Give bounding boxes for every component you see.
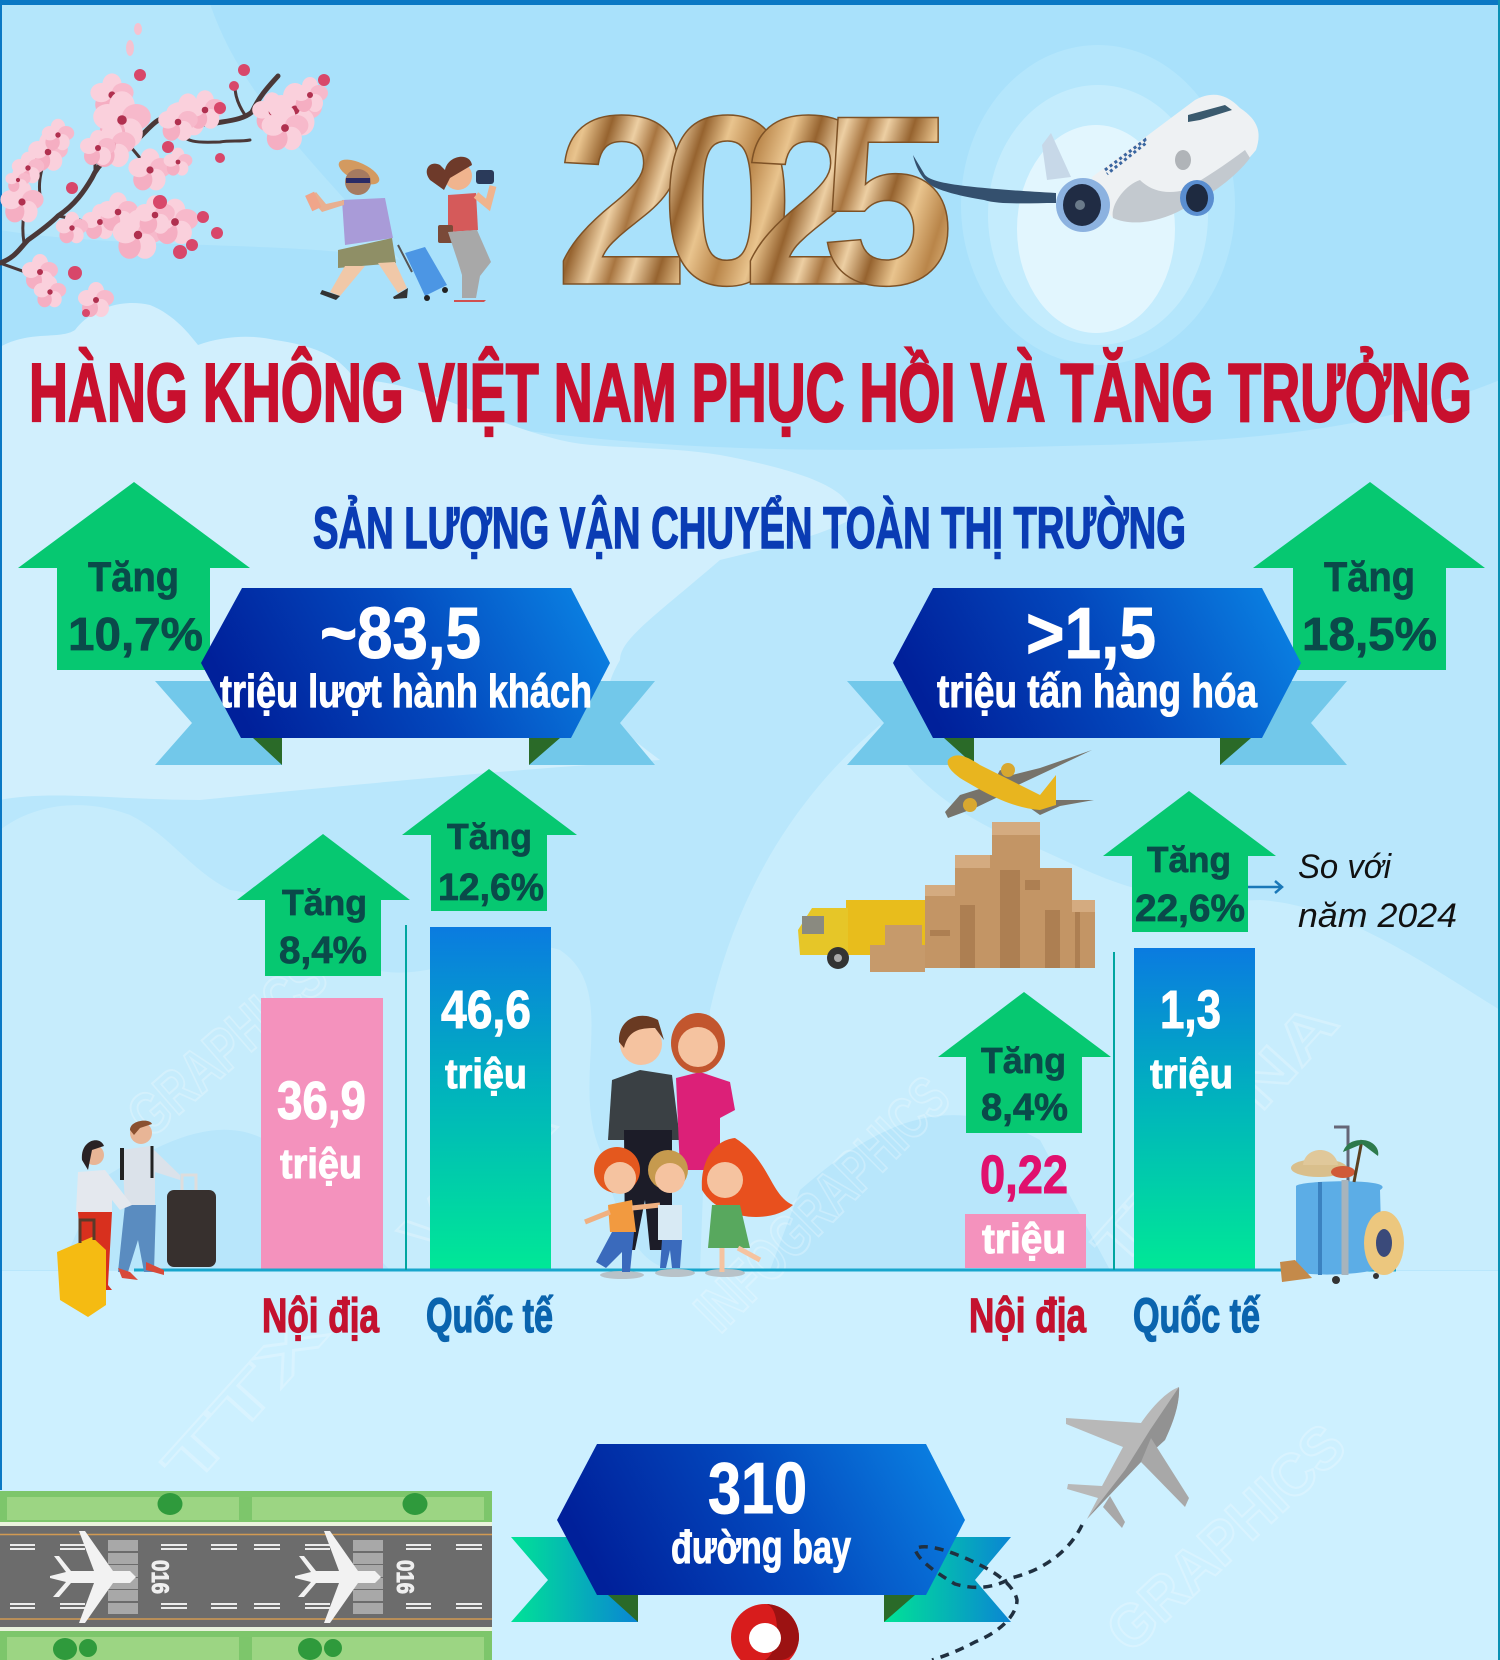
cargo plane bbox=[945, 750, 1094, 818]
ribbon: cargo: >1,5 bbox=[1026, 594, 1156, 674]
bar: domestic passengers: 36,9 bbox=[277, 1071, 366, 1131]
blue suitcase bbox=[398, 245, 448, 301]
ribbon: passengers: ~83,5 bbox=[320, 594, 481, 674]
arrow: domestic passenger growth: Tăng bbox=[282, 882, 367, 923]
gray airplane bbox=[1066, 1387, 1189, 1528]
runway illustration bbox=[0, 1491, 492, 1660]
ribbon: cargo: triệu tấn hàng hóa bbox=[937, 665, 1257, 717]
note: compared with 2024: năm 2024 bbox=[1298, 897, 1457, 935]
runway illustration: 016 bbox=[146, 1560, 173, 1594]
arrow: international passenger growth: Tăng bbox=[447, 816, 532, 857]
arrow: cargo growth: Tăng bbox=[1324, 553, 1415, 600]
dashed flight path bbox=[915, 1525, 1082, 1660]
note: compared with 2024: So với bbox=[1298, 848, 1392, 886]
ribbon: flight routes: đường bay bbox=[671, 1521, 851, 1573]
arrow: domestic cargo growth: Tăng bbox=[981, 1040, 1066, 1081]
arrow: international passenger growth bbox=[402, 769, 577, 911]
family bbox=[585, 1013, 793, 1279]
ribbon: cargo bbox=[847, 588, 1347, 765]
sun glow bbox=[961, 45, 1235, 365]
arrow: cargo growth bbox=[1253, 482, 1485, 670]
bar: domestic cargo: 0,22 bbox=[980, 1145, 1068, 1205]
note: compared with 2024 bbox=[1248, 848, 1457, 935]
labels: cargo: Quốc tế bbox=[1133, 1290, 1260, 1343]
tourist man bbox=[305, 155, 408, 300]
watermarks: GRAPHICS bbox=[1093, 1411, 1358, 1660]
arrow: international cargo growth bbox=[1103, 791, 1276, 932]
bar: international cargo bbox=[1134, 948, 1255, 1269]
arrow: domestic passenger growth bbox=[237, 834, 410, 976]
travellers with luggage bbox=[57, 1121, 216, 1317]
arrow: passengers growth: 10,7% bbox=[68, 608, 203, 660]
watermarks bbox=[115, 942, 1358, 1660]
arrow: international passenger growth: 12,6% bbox=[438, 867, 544, 909]
watermarks: TTXVNA bbox=[1080, 989, 1350, 1279]
ribbon: flight routes bbox=[511, 1444, 1011, 1622]
gold 2025: 2025 bbox=[555, 66, 955, 336]
arrow: passengers growth: Tăng bbox=[88, 553, 179, 600]
arrow: international cargo growth: 22,6% bbox=[1135, 888, 1245, 930]
chart axes bbox=[134, 925, 1396, 1270]
labels: cargo: Nội địa bbox=[969, 1290, 1086, 1343]
bar: domestic cargo: triệu bbox=[982, 1215, 1066, 1262]
bar: international cargo: triệu bbox=[1150, 1050, 1233, 1097]
bar: international cargo: 1,3 bbox=[1160, 980, 1221, 1040]
arrow: passengers growth bbox=[18, 482, 250, 670]
bar: domestic passengers bbox=[261, 998, 383, 1270]
arrow: cargo growth: 18,5% bbox=[1302, 608, 1437, 660]
arrow: international cargo growth: Tăng bbox=[1147, 839, 1231, 880]
ribbon: passengers: triệu lượt hành khách bbox=[220, 665, 592, 717]
tourist woman bbox=[427, 157, 494, 302]
arrow: domestic cargo growth bbox=[938, 992, 1111, 1133]
truck and cargo boxes bbox=[798, 822, 1095, 972]
labels: passengers: Nội địa bbox=[262, 1290, 379, 1343]
bar: international passengers: triệu bbox=[445, 1050, 527, 1097]
bar: international passengers: 46,6 bbox=[441, 980, 531, 1040]
watermarks: TTX bbox=[150, 1298, 340, 1499]
airliner bbox=[913, 95, 1259, 232]
cherry blossom branch bbox=[0, 23, 330, 317]
labels: passengers: Quốc tế bbox=[426, 1290, 553, 1343]
ribbon: flight routes: 310 bbox=[708, 1449, 807, 1529]
tourist couple bbox=[305, 155, 494, 302]
ribbon: passengers bbox=[155, 588, 655, 765]
watermarks: INFOGRAPHICS bbox=[682, 1063, 963, 1344]
watermarks: GRAPHICS bbox=[115, 942, 340, 1150]
runway illustration: 016 bbox=[391, 1560, 418, 1594]
bar: domestic cargo bbox=[965, 1145, 1086, 1268]
bar: international passengers bbox=[430, 927, 551, 1270]
arrow: domestic cargo growth: 8,4% bbox=[981, 1087, 1068, 1129]
labels: passengers bbox=[262, 1290, 553, 1343]
bar: domestic passengers: triệu bbox=[280, 1140, 362, 1187]
travel suitcase bbox=[1280, 1127, 1404, 1284]
watermarks: VNA bbox=[387, 1087, 569, 1269]
icon: location pin bbox=[731, 1604, 799, 1660]
arrow: domestic passenger growth: 8,4% bbox=[279, 930, 367, 972]
labels: cargo bbox=[969, 1290, 1260, 1343]
